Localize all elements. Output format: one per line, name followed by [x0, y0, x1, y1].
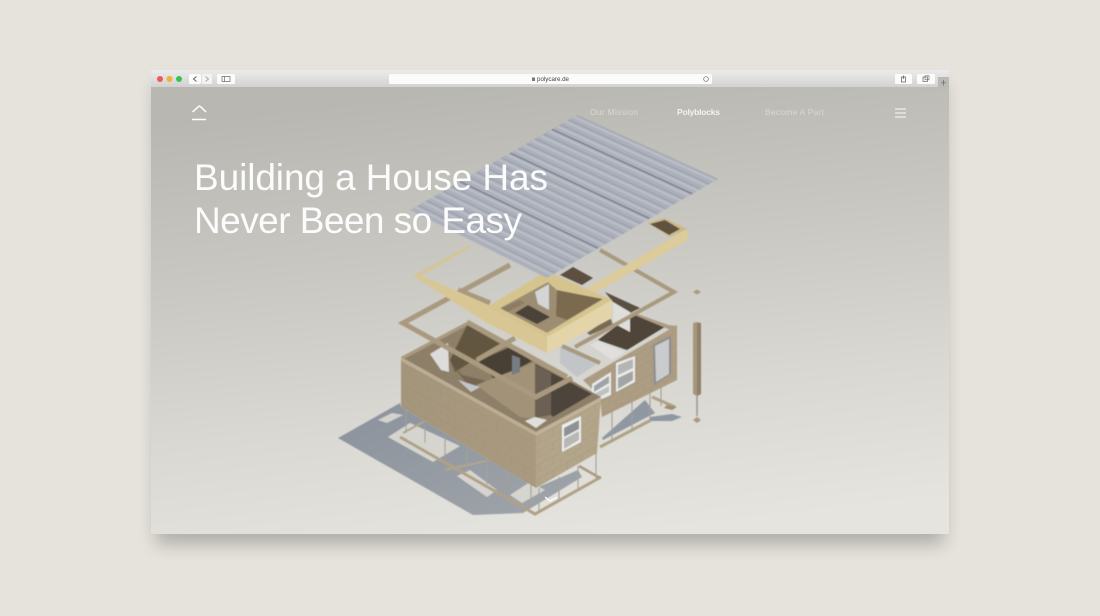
share and tabs buttons — [895, 74, 935, 84]
page hero background — [151, 87, 949, 534]
interior rooms — [401, 322, 601, 436]
headline: Building a House Has — [194, 157, 548, 198]
lower tan ring beam — [403, 265, 572, 397]
box top ring — [487, 275, 612, 337]
side window right — [616, 356, 635, 392]
browser toolbar — [151, 70, 949, 88]
address bar — [389, 74, 712, 84]
side window left — [592, 372, 611, 403]
browser window — [151, 70, 949, 534]
headline: Never Been so Easy — [194, 200, 522, 241]
box interior — [500, 282, 603, 333]
yellow ring beam with box — [413, 218, 688, 353]
front window — [562, 416, 581, 452]
interior of right room — [560, 292, 677, 377]
navigation — [590, 107, 825, 117]
sidebar button — [217, 74, 235, 84]
headline — [194, 157, 548, 241]
scroll down chevron — [545, 497, 557, 501]
upper tan ring beam — [562, 250, 674, 363]
browser mockup illustration — [146, 70, 954, 554]
door — [653, 336, 671, 385]
navigation: Become A Part — [765, 107, 825, 117]
window drop shadow — [156, 84, 944, 544]
new tab button — [938, 77, 949, 88]
navigation: Our Mission — [590, 107, 638, 117]
logo — [192, 106, 206, 120]
box front face — [547, 300, 612, 353]
ground shadows — [338, 400, 682, 515]
main wall block — [401, 357, 601, 488]
foundation beams and posts — [400, 378, 677, 514]
address bar: polycare.de — [537, 77, 570, 83]
back and forward buttons — [189, 74, 212, 84]
corrugated roof — [410, 115, 718, 278]
loose block and column — [693, 290, 701, 423]
exploded house illustration — [338, 115, 718, 515]
traffic lights — [157, 76, 182, 82]
front yellow band — [413, 275, 547, 353]
navigation: Polyblocks — [677, 107, 720, 117]
far corner of arm — [648, 218, 687, 237]
long yellow arm — [587, 229, 688, 293]
hamburger menu — [895, 109, 906, 117]
rear wall block — [583, 325, 677, 417]
thin yellow arm — [413, 246, 470, 276]
